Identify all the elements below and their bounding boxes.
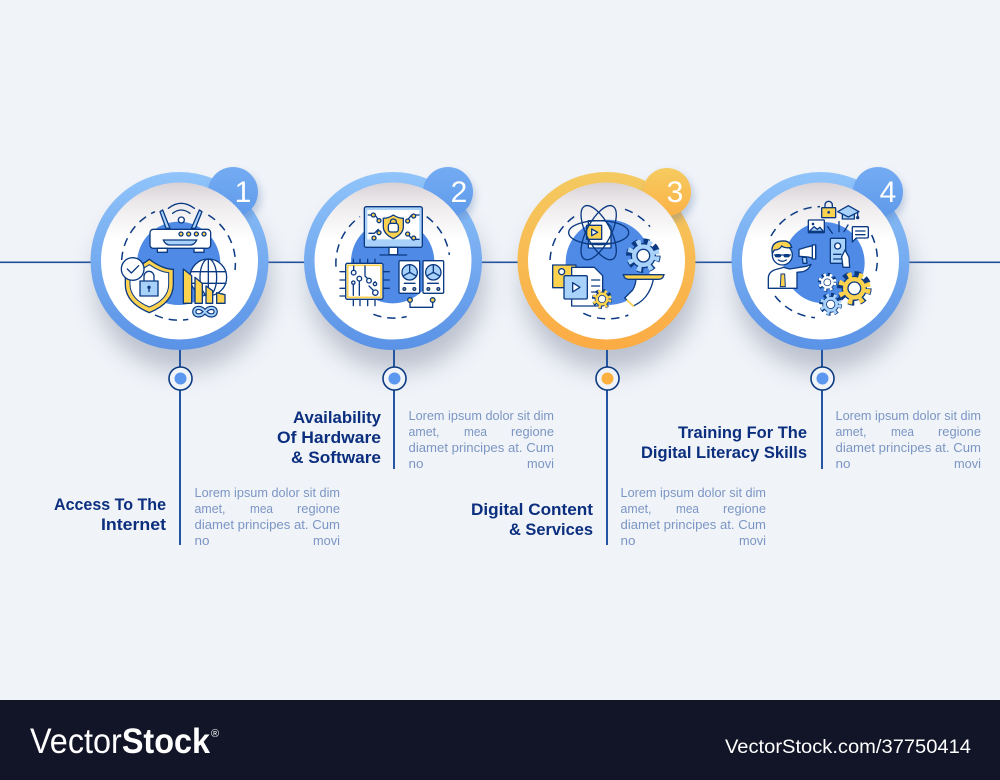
heading: step 1: Internet bbox=[101, 515, 166, 534]
body: step 3: diamet principes at. Cum bbox=[620, 517, 766, 532]
horizontal timeline bbox=[0, 262, 1000, 263]
body: step 4: regione bbox=[938, 424, 981, 439]
panel: step 1 shadow bbox=[95, 195, 271, 371]
body: step 2: regione bbox=[511, 424, 554, 439]
body: step 3 bbox=[620, 485, 766, 548]
icon: presenter, phone, gears bbox=[768, 201, 877, 318]
heading: step 2: & Software bbox=[291, 448, 381, 467]
icon: router, shield, globe bbox=[121, 203, 235, 320]
body: step 4: movi bbox=[954, 456, 981, 471]
heading: step 1: Access To The bbox=[54, 495, 166, 514]
body: step 3: Lorem ipsum dolor sit dim bbox=[620, 485, 766, 500]
body: step 1: Lorem ipsum dolor sit dim bbox=[194, 485, 340, 500]
body: step 1: no bbox=[194, 533, 210, 548]
step 3 connector bbox=[596, 345, 619, 545]
body: step 1: amet, bbox=[194, 501, 226, 516]
heading: step 3: Digital Content bbox=[471, 500, 593, 519]
panel: step 4 circle bbox=[732, 167, 910, 350]
heading: step 3: & Services bbox=[509, 520, 593, 539]
panel: step 3 shadow bbox=[522, 195, 698, 371]
panel: step 1 circle bbox=[90, 167, 268, 350]
body: step 4: mea bbox=[891, 424, 915, 439]
footer bar bbox=[0, 700, 1000, 780]
heading: step 1 bbox=[54, 495, 166, 534]
heading: step 2: Of Hardware bbox=[277, 428, 381, 447]
panel: step 3 circle bbox=[518, 168, 696, 350]
body: step 4 bbox=[836, 408, 981, 471]
panel: step 2 circle bbox=[304, 167, 482, 350]
body: step 4: diamet principes at. Cum bbox=[836, 440, 981, 455]
text block: step 1 bbox=[54, 485, 340, 548]
heading: step 2 bbox=[277, 408, 382, 467]
heading: step 3 bbox=[471, 500, 593, 539]
body: step 3: regione bbox=[723, 501, 766, 516]
body: step 2: diamet principes at. Cum bbox=[408, 440, 554, 455]
step 4 connector bbox=[811, 345, 834, 469]
body: step 4: no bbox=[836, 456, 850, 471]
number 1: 1 bbox=[235, 176, 251, 209]
icon: atom, gear, tray, media files bbox=[550, 201, 664, 319]
heading: step 2: Availability bbox=[293, 408, 382, 427]
text block: step 3 bbox=[471, 485, 766, 548]
body: step 3: mea bbox=[676, 501, 700, 516]
body: step 2: movi bbox=[527, 456, 554, 471]
body: step 2 bbox=[408, 408, 554, 471]
body: step 3: movi bbox=[739, 533, 766, 548]
body: step 1: mea bbox=[250, 501, 274, 516]
number 3: 3 bbox=[667, 176, 683, 209]
number 2: 2 bbox=[451, 176, 467, 209]
registered mark: ® bbox=[211, 728, 219, 740]
heading: step 4: Digital Literacy Skills bbox=[641, 443, 807, 462]
heading: step 4: Training For The bbox=[678, 423, 807, 442]
panel: step 2 shadow bbox=[309, 195, 485, 371]
body: step 4: Lorem ipsum dolor sit dim bbox=[836, 408, 981, 423]
heading: step 4 bbox=[641, 423, 807, 462]
body: step 1 bbox=[194, 485, 340, 548]
body: step 1: movi bbox=[313, 533, 340, 548]
step 2 connector bbox=[383, 345, 406, 469]
body: step 3: no bbox=[620, 533, 636, 548]
icon: monitor, chip, graphics cards bbox=[336, 207, 449, 318]
footer logo: VectorStock bbox=[30, 722, 210, 761]
body: step 2: mea bbox=[464, 424, 488, 439]
body: step 1: diamet principes at. Cum bbox=[194, 517, 340, 532]
panel: step 4 shadow bbox=[736, 195, 912, 371]
body: step 2: no bbox=[408, 456, 424, 471]
body: step 2: Lorem ipsum dolor sit dim bbox=[408, 408, 554, 423]
step 1 connector bbox=[169, 345, 192, 545]
footer image id: VectorStock.com/37750414 bbox=[725, 737, 971, 758]
body: step 4: amet, bbox=[836, 424, 866, 439]
body: step 1: regione bbox=[297, 501, 340, 516]
body: step 2: amet, bbox=[408, 424, 440, 439]
body: step 3: amet, bbox=[620, 501, 652, 516]
text block: step 2 bbox=[277, 408, 554, 471]
number 4: 4 bbox=[880, 176, 896, 209]
text block: step 4 bbox=[641, 408, 981, 471]
